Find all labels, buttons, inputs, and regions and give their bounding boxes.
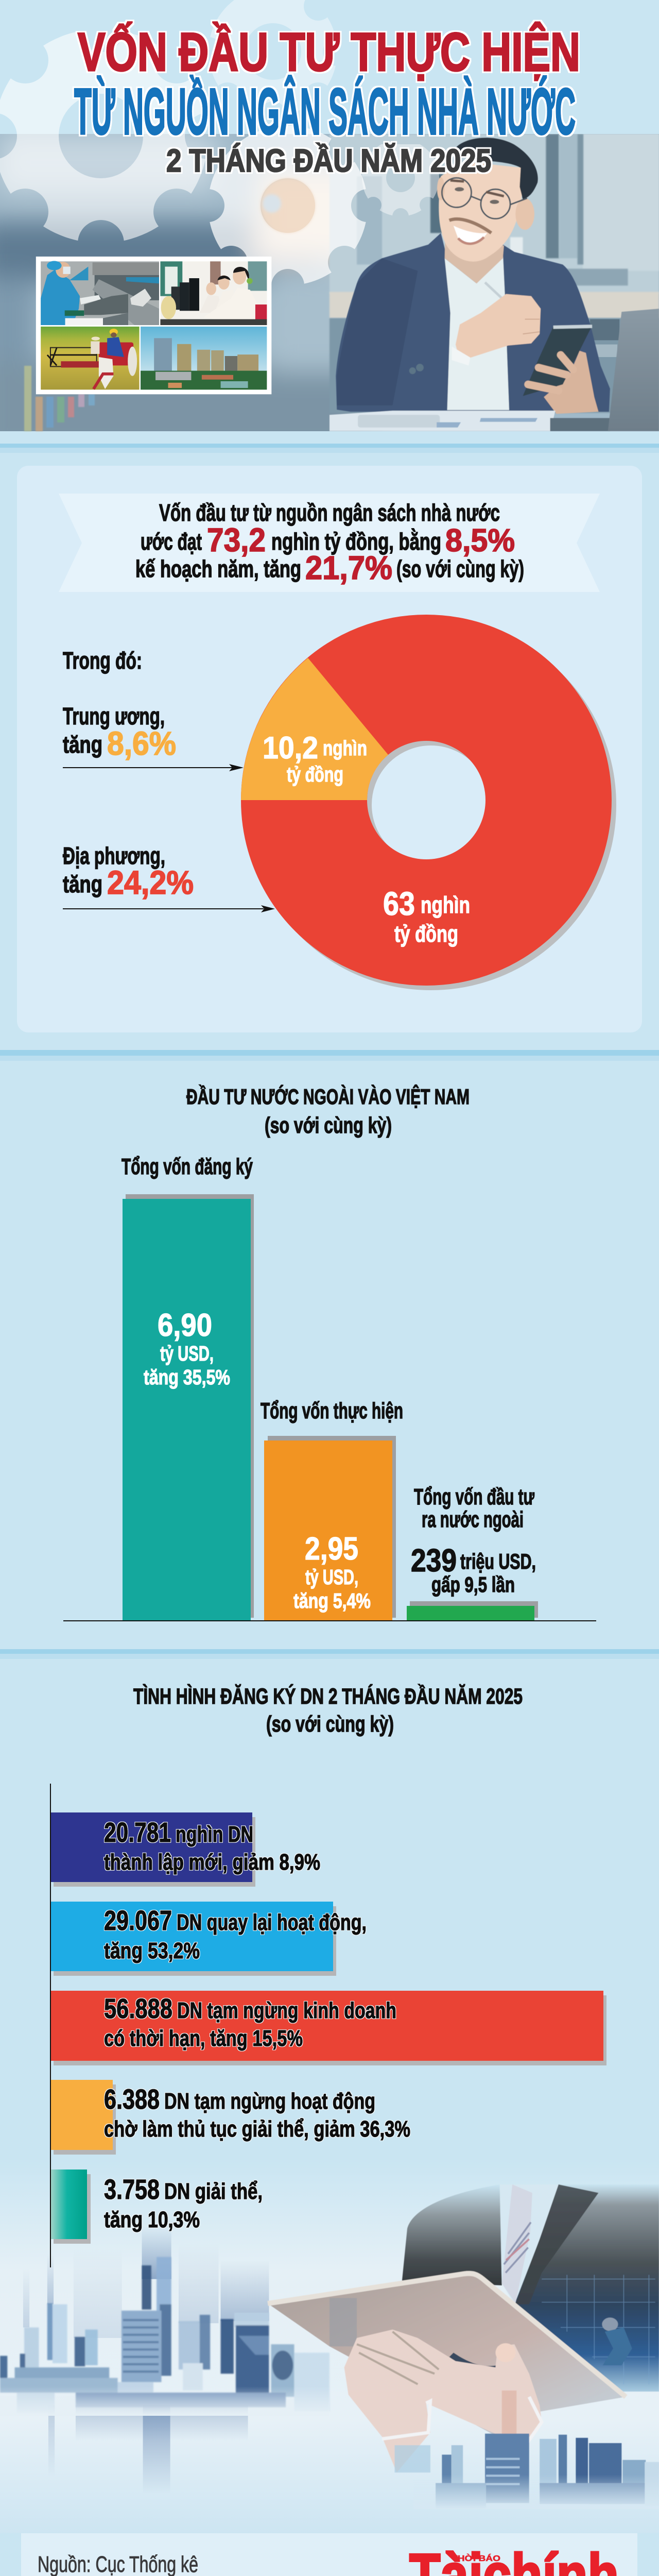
ribbon headline: Vốn đầu tư từ nguồn ngân sách nhà nước [159,499,500,526]
man with phone [330,138,659,431]
bottom background: city and businessman [0,2159,659,2533]
photo: factory workers [41,261,159,325]
photo: call centre [160,261,267,325]
ribbon headline: kế hoạch năm, tăng [135,555,301,582]
ribbon headline: (so với cùng kỳ) [396,555,524,582]
bar: dissolved: 3.758 [104,2174,160,2205]
label: central budget: Trung ương, [63,703,165,730]
label: central budget [63,703,176,762]
FDI heading [186,1084,470,1138]
panel: foreign direct investment [63,1084,596,1621]
bar: temporarily suspended [50,1991,606,2065]
bar: resumed operations [50,1902,367,1976]
business heading: TÌNH HÌNH ĐĂNG KÝ DN 2 THÁNG ĐẦU NĂM 2025 [133,1684,523,1709]
label: local budget: 24,2% [107,864,194,901]
title: 2 THÁNG ĐẦU NĂM 2025 [166,143,491,179]
bar: implemented capital [261,1398,403,1621]
footer canvas [21,2533,637,2576]
baseline axis [63,1620,596,1621]
ribbon headline: nghìn tỷ đồng, bằng [271,528,441,555]
bar: outward investment: ra nước ngoài [422,1507,524,1532]
section divider stripes [0,444,659,1659]
header photo band [0,134,659,459]
label: local budget: tăng [63,871,102,897]
panel: business registration [50,1684,606,2267]
businessman with tablet [268,2184,659,2510]
bar: outward investment: 239 [411,1543,457,1579]
ribbon headline: 73,2 [207,521,266,558]
donut chart: 10,2 [263,731,318,765]
right side office background [330,134,659,413]
bar: dissolved: DN giải thể, [164,2179,263,2204]
donut chart: 63 [383,885,415,922]
arrow: local [63,905,275,912]
bar: newly established: thành lập mới, giảm 8,9% [104,1850,320,1875]
arrow: central [63,764,244,771]
ribbon headline: 8,5% [445,523,515,558]
bar: resumed operations: 29.067 [104,1905,172,1936]
city skyline [0,2227,330,2494]
logo: Thời báo Tài chính Việt Nam: THỜI BÁO [452,2553,500,2563]
bar: temporarily suspended: có thời hạn, tăng 15,5% [104,2026,303,2051]
ribbon headline: ước đạt [141,528,202,555]
donut chart [241,658,553,947]
photo: rice harvester [41,327,140,389]
photo collage [36,257,271,394]
business heading [133,1684,523,1737]
bar: implemented capital: tăng 5,4% [293,1589,371,1613]
label: in which: Trong đó: [63,647,142,674]
photo: city buildings [141,327,267,389]
bar: outward investment: gấp 9,5 lần [431,1572,515,1597]
bar: newly established [50,1812,320,1887]
label: local budget [63,842,194,901]
bar: awaiting dissolution: chờ làm thủ tục giải thể, giảm 36,3% [104,2116,410,2142]
business heading: (so với cùng kỳ) [266,1711,394,1737]
bar: awaiting dissolution [50,2080,410,2155]
bar: dissolved: tăng 10,3% [104,2207,200,2232]
bar: newly established: 20.781 [104,1817,171,1848]
FDI heading: ĐẦU TƯ NƯỚC NGOÀI VÀO VIỆT NAM [186,1084,470,1109]
bar: temporarily suspended: 56.888 [104,1993,172,2024]
bar: implemented capital: Tổng vốn thực hiện [261,1398,403,1423]
bar: registered capital [122,1154,254,1621]
data display bars [24,366,95,431]
bar: awaiting dissolution: 6.388 [104,2084,160,2115]
bar: newly established: nghìn DN [176,1822,253,1847]
FDI heading: (so với cùng kỳ) [265,1113,392,1138]
vertical axis [50,1784,51,2267]
footer panel [21,2533,637,2576]
bar: temporarily suspended: DN tạm ngừng kinh doanh [177,1998,396,2023]
bar: registered capital: 6,90 [158,1308,212,1343]
donut chart: nghìn [421,892,470,918]
bar: registered capital: tỷ USD, [160,1342,214,1365]
panel: public investment capital [17,466,642,1032]
bar: resumed operations: tăng 53,2% [104,1938,200,1963]
donut chart: tỷ đồng [394,921,458,947]
ribbon headline [59,494,600,592]
bar: registered capital: Tổng vốn đăng ký [122,1154,253,1179]
bar: registered capital: tăng 35,5% [144,1365,230,1389]
warm light glow [261,178,315,233]
bar: outward investment: triệu USD, [460,1549,536,1573]
ribbon headline: 21,7% [305,549,392,586]
label: central budget: tăng [63,731,102,758]
bar: implemented capital: tỷ USD, [305,1565,358,1589]
label: central budget: 8,6% [107,725,176,762]
title [74,22,580,179]
bar: outward investment: Tổng vốn đầu tư [414,1484,534,1510]
bar: dissolved [50,2170,263,2244]
bar: awaiting dissolution: DN tạm ngừng hoạt động [164,2089,375,2114]
label: local budget: Địa phương, [63,842,165,869]
bar: resumed operations: DN quay lại hoạt động, [177,1910,367,1935]
bar: implemented capital: 2,95 [305,1531,358,1567]
donut chart: nghìn [323,736,367,760]
donut chart: tỷ đồng [287,762,343,786]
bar: outward investment [407,1484,538,1621]
gears background [0,0,453,299]
